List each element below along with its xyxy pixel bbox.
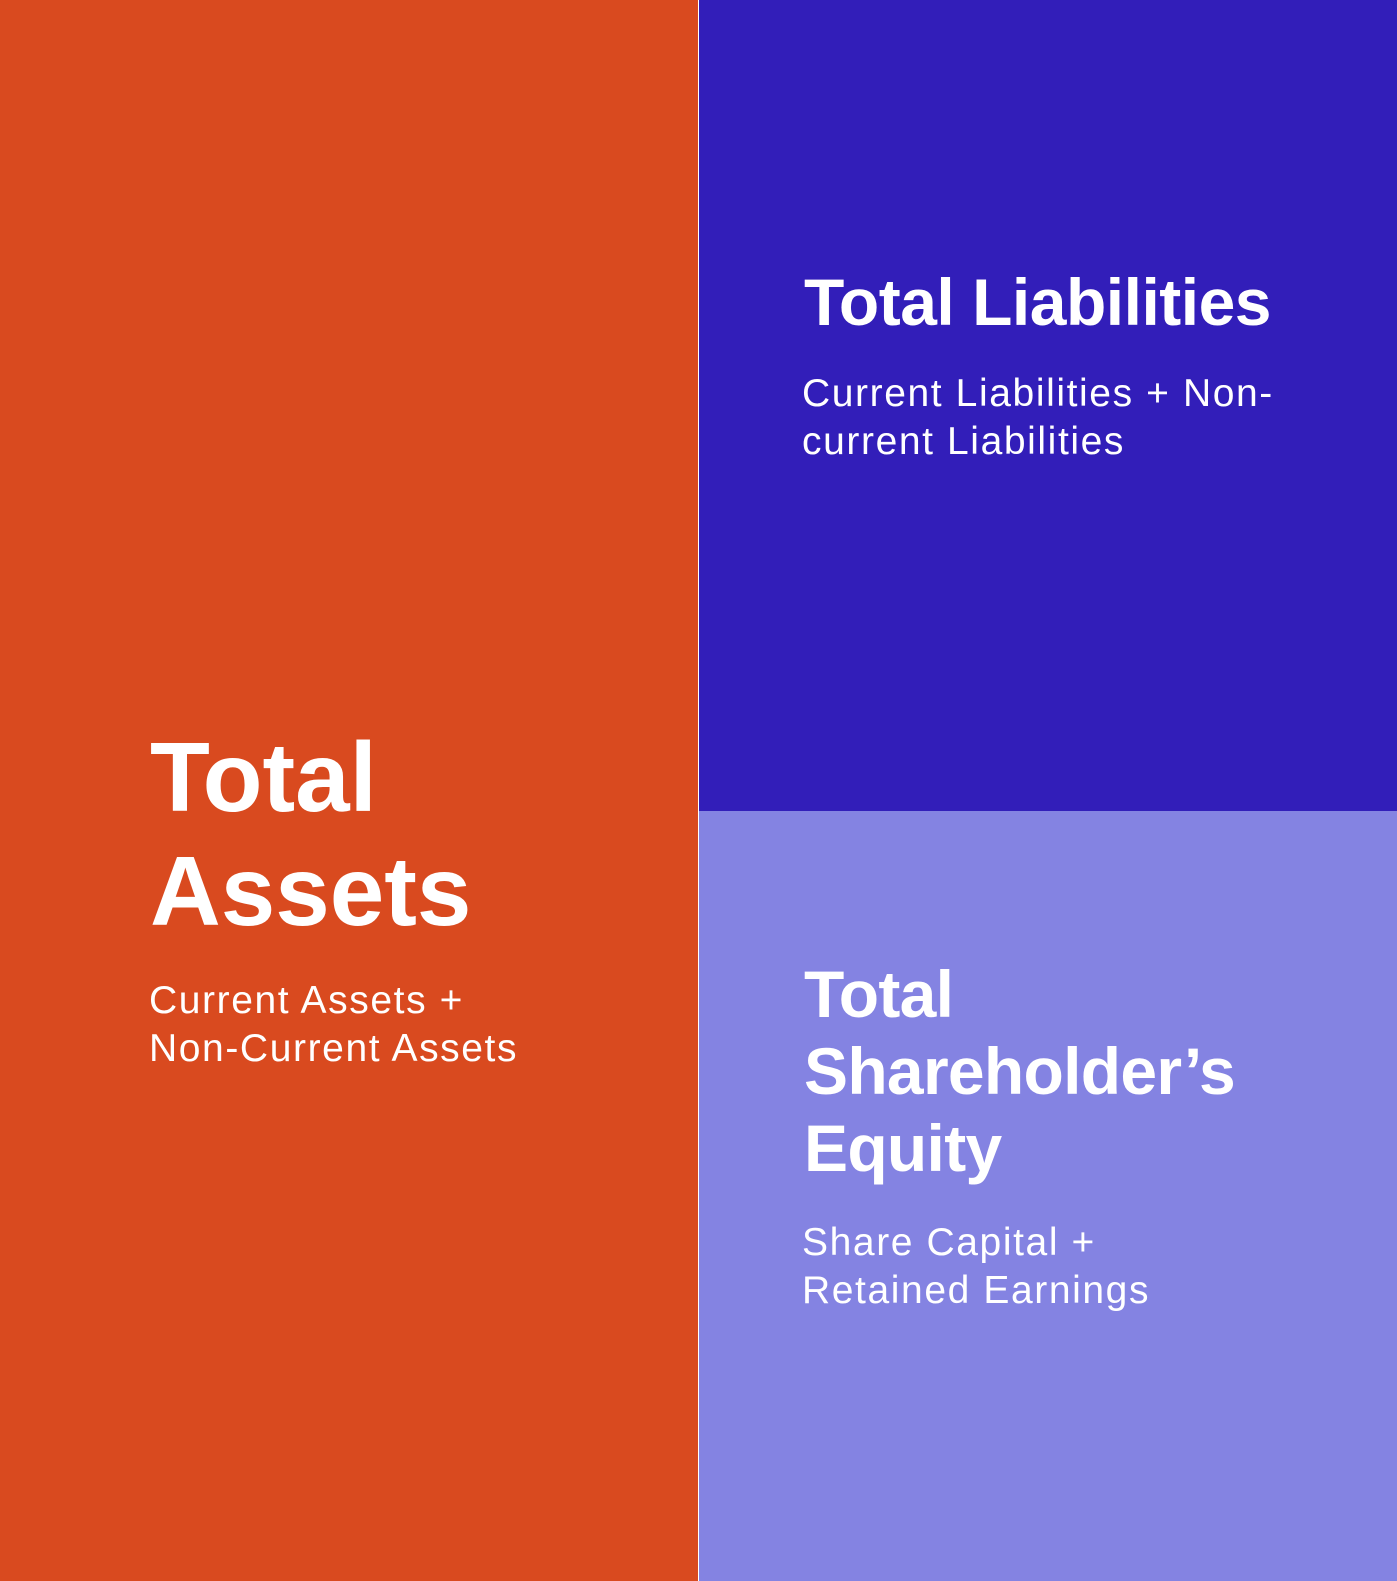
text: equity formula xyxy=(802,1221,1150,1312)
heading: total assets: Assets xyxy=(150,836,471,946)
heading: total shareholder's equity: Total xyxy=(804,957,953,1031)
heading: total liabilities: Total Liabilities xyxy=(804,265,1271,339)
text: equity formula: Retained Earnings xyxy=(802,1269,1150,1312)
text: assets formula xyxy=(149,979,518,1070)
text: liabilities formula: Current Liabilities + Non- xyxy=(802,372,1274,415)
heading: total assets xyxy=(150,722,471,946)
text: liabilities formula xyxy=(802,372,1274,463)
panel: total assets xyxy=(0,0,698,1581)
heading: total shareholder's equity: Equity xyxy=(804,1111,1001,1185)
heading: total shareholder's equity xyxy=(804,957,1235,1185)
panel: total liabilities xyxy=(699,0,1397,811)
heading: total assets: Total xyxy=(150,722,377,832)
text: liabilities formula: current Liabilities xyxy=(802,420,1125,463)
text: assets formula: Non-Current Assets xyxy=(149,1027,518,1070)
text: assets formula: Current Assets + xyxy=(149,979,464,1022)
panel: shareholder's equity xyxy=(699,811,1397,1581)
text: equity formula: Share Capital + xyxy=(802,1221,1096,1264)
heading: total shareholder's equity: Shareholder’s xyxy=(804,1034,1235,1108)
